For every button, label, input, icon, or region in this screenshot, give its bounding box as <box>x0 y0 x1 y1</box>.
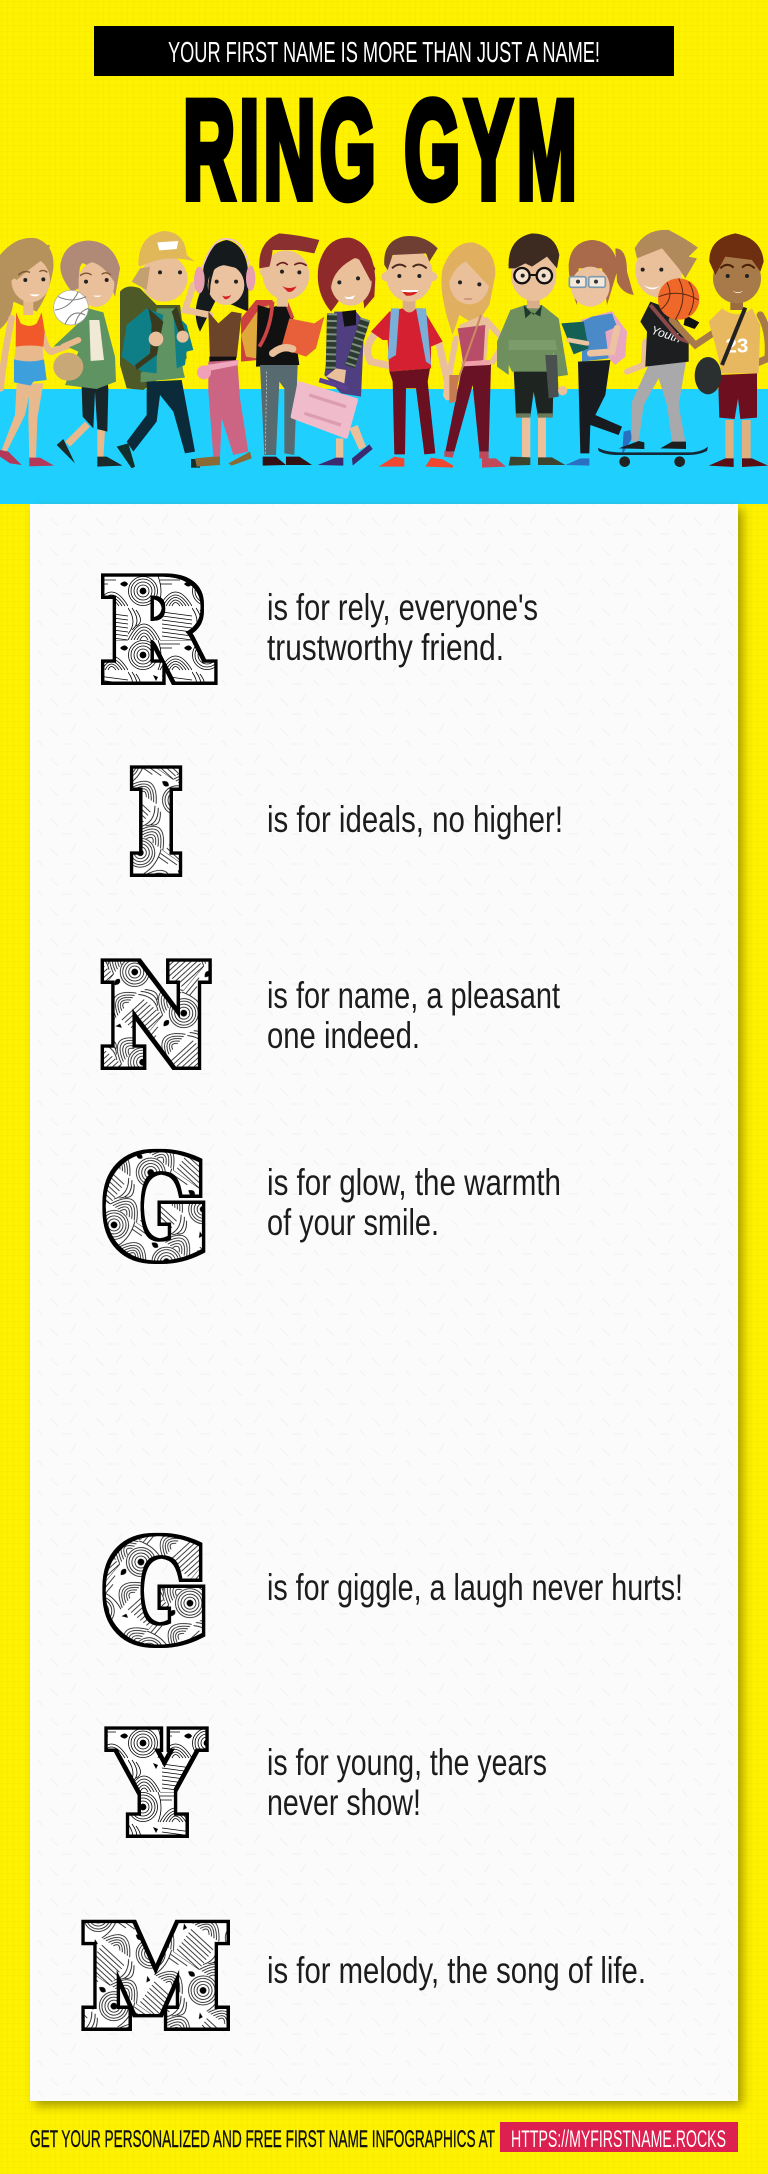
text N: one indeed. <box>267 1015 420 1056</box>
person 9: boy with glasses and laptop <box>497 233 568 466</box>
text G <box>267 1162 561 1243</box>
text R <box>267 587 538 668</box>
person 10: girl with ponytail and book <box>561 240 634 466</box>
row I <box>133 749 563 899</box>
text G: of your smile. <box>267 1202 439 1243</box>
person 6: girl with pink bag <box>293 238 375 466</box>
letter Y: Y <box>112 1710 201 1860</box>
person 1: girl in orange top <box>0 238 78 466</box>
person 11: skateboarder with basketball <box>598 230 715 467</box>
letter N: N <box>104 942 208 1092</box>
text G: is for glow, the warmth <box>267 1162 561 1203</box>
text R: is for rely, everyone's <box>267 587 538 628</box>
text Y: never show! <box>267 1782 421 1823</box>
text M: is for melody, the song of life. <box>267 1950 646 1991</box>
person 12: boy in yellow jersey <box>695 233 768 467</box>
person 3: hiker with cap and backpack <box>117 231 200 468</box>
row G <box>106 1134 561 1284</box>
text R: trustworthy friend. <box>267 627 504 668</box>
letter M: M <box>85 1903 227 2053</box>
letter I: I <box>133 749 179 899</box>
text Y: is for young, the years <box>267 1742 547 1783</box>
row G second <box>106 1518 683 1668</box>
person 4: girl with headphones <box>185 239 255 467</box>
letter R: R <box>104 557 210 707</box>
person 12: boy in yellow jersey: 23 <box>725 334 748 357</box>
person 8: blonde girl <box>441 242 506 468</box>
text N: is for name, a pleasant <box>267 975 561 1016</box>
text I: is for ideals, no higher! <box>267 799 563 840</box>
white content panel <box>30 504 738 2101</box>
row N <box>104 942 561 1092</box>
row Y <box>112 1710 547 1860</box>
blue floor <box>0 389 768 504</box>
person 11: skateboarder with basketball: Youth <box>649 323 683 346</box>
row M <box>85 1903 646 2053</box>
text N <box>267 975 561 1056</box>
tagline bar <box>94 26 674 76</box>
letter G second: G <box>106 1518 206 1668</box>
person 7: boy in red tee <box>368 236 453 468</box>
text Y <box>267 1742 547 1823</box>
person 5: boy reading orange book <box>241 233 324 466</box>
letter G: G <box>106 1134 206 1284</box>
person 2: girl with volleyball <box>53 241 123 467</box>
row R <box>104 557 538 707</box>
